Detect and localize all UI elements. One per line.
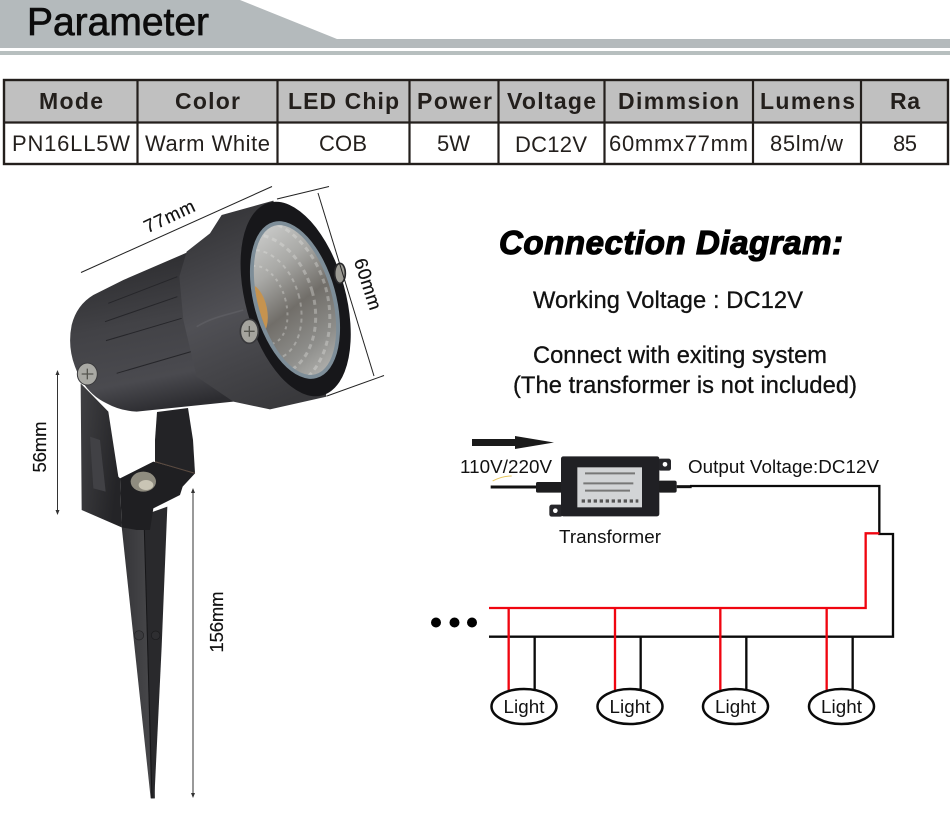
- connection note line 1: Connect with exiting system: [533, 343, 827, 369]
- light 4: [809, 689, 874, 724]
- output voltage label: Output Voltage:DC12V: [688, 456, 879, 477]
- light 1: [492, 689, 556, 724]
- front bracket and base: [81, 383, 195, 530]
- transformer label: Transformer: [559, 526, 661, 547]
- spike: [122, 507, 167, 798]
- heading: Connection Diagram: Connection Diagram:: [499, 224, 843, 261]
- front ring: [221, 189, 371, 409]
- rear housing: [70, 253, 233, 412]
- connection note line 2: (The transformer is not included): [513, 373, 857, 399]
- light 2: [598, 689, 662, 724]
- lens reflector: [254, 225, 336, 375]
- COB chip: [254, 286, 268, 328]
- table value row: 85lm/w: [770, 131, 843, 156]
- table header row: [39, 88, 920, 114]
- light 2: Light: [610, 696, 651, 717]
- input arrow: [472, 436, 554, 449]
- bolts: [77, 263, 345, 385]
- light 3: Light: [715, 696, 757, 717]
- table header row: Mode: [39, 88, 103, 114]
- dimension: 77mm: 77mm: [140, 195, 198, 237]
- product photo: spike spotlight: [70, 189, 371, 798]
- transformer: [491, 456, 692, 517]
- rear bracket upper: [155, 408, 195, 473]
- black wires: [489, 486, 893, 689]
- light 3: [703, 689, 768, 724]
- table header row: Power: [417, 88, 492, 114]
- table header row: Voltage: [507, 88, 596, 114]
- front collar: [179, 201, 327, 409]
- table value row: [12, 131, 917, 157]
- dimension: 56mm: 56mm: [29, 422, 50, 472]
- table header row: Dimmsion: [618, 88, 739, 114]
- light 4: Light: [821, 696, 863, 717]
- table value row: 60mmx77mm: [609, 131, 748, 156]
- input voltage label: 110V/220V: [460, 456, 552, 477]
- wiring diagram: [431, 436, 893, 724]
- working voltage text: Working Voltage : DC12V: [533, 288, 803, 314]
- blue-grey lens rim: [234, 211, 356, 389]
- dimension: 77mm: [81, 186, 329, 272]
- table value row: COB: [319, 131, 367, 156]
- table header row: Ra: [890, 88, 920, 114]
- dimension: 156mm: [191, 488, 227, 798]
- continuation dots: [431, 618, 477, 628]
- light 1: Light: [504, 696, 545, 717]
- table value row: 85: [893, 131, 917, 156]
- table value row: 5W: [437, 131, 470, 156]
- lamp head: [70, 189, 371, 412]
- table value row: PN16LL5W: [12, 131, 130, 156]
- table header row: Color: [175, 88, 240, 114]
- dimension: 56mm: [29, 370, 60, 515]
- table value row: Warm White: [145, 131, 270, 156]
- table value row: DC12V: [515, 132, 587, 157]
- table header row: LED Chip: [288, 88, 399, 114]
- header banner: Parameter: [0, 0, 950, 55]
- dimension: 156mm: 156mm: [206, 592, 227, 652]
- red wires: [489, 533, 879, 690]
- parameter table: [3, 80, 949, 164]
- dimension: 60mm: [318, 193, 386, 396]
- table header row: Lumens: [760, 88, 855, 114]
- title: Parameter: [27, 1, 209, 44]
- dimension: 60mm: 60mm: [350, 256, 386, 312]
